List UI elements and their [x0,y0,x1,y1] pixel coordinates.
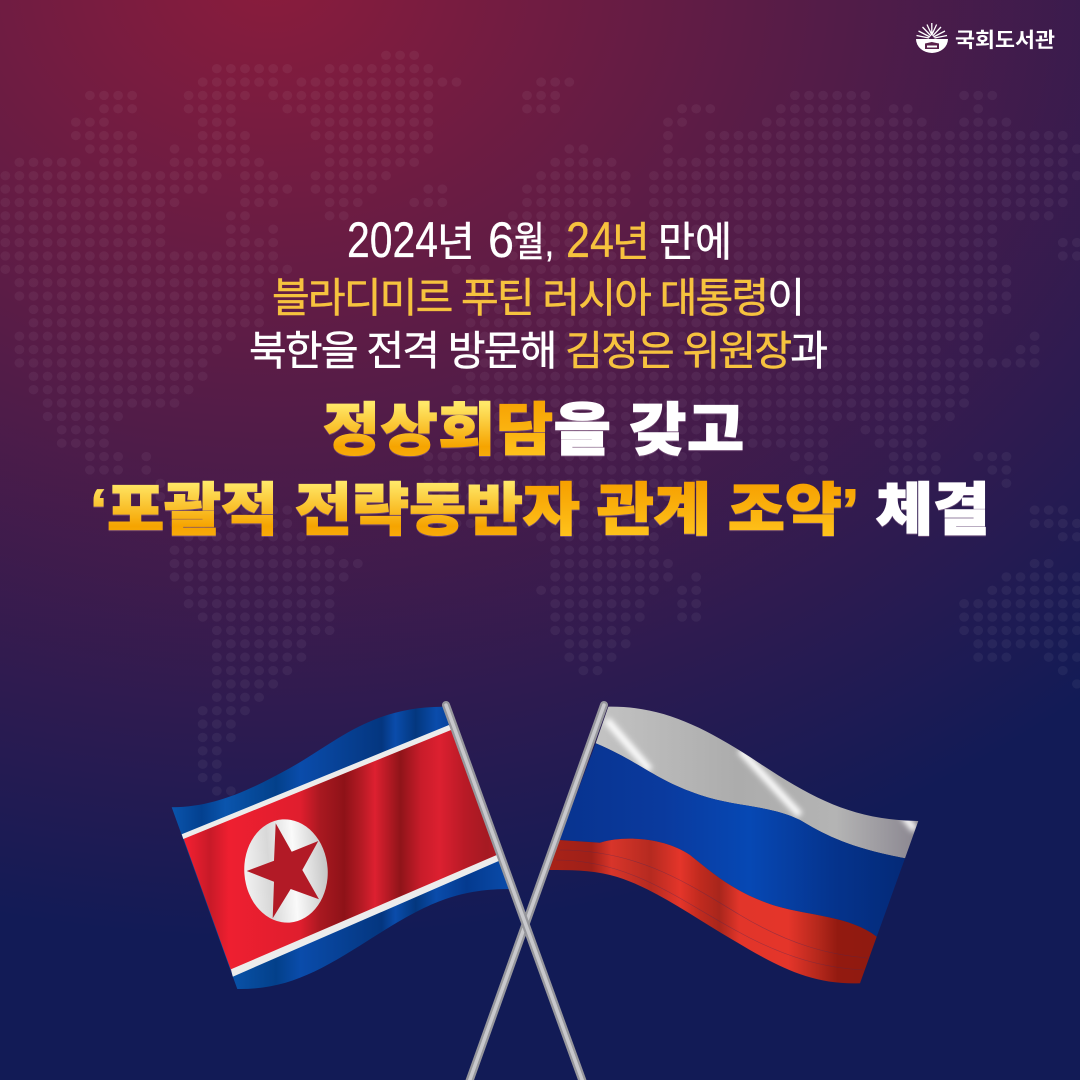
logo: National Assembly Library [916,23,1055,53]
line 1: 년 [437,219,475,265]
headline line 2: ‘포괄적 전략동반자 관계 조약’ 체결 [90,478,990,542]
emblem: red star [247,823,319,918]
line 1: 24 [566,212,614,268]
flagpole: Russia [468,705,604,1080]
emblem: white disc [241,817,331,925]
line 1 [347,212,732,268]
headline [90,398,990,542]
line 1: 월, [514,219,554,265]
flag: Russia [549,707,918,983]
white band [596,707,918,858]
logo wordmark: 국회도서관 [955,29,1055,52]
icon: open book bowl with rays [916,23,948,53]
headline line 1: 정상회담을 갖고 [323,398,744,462]
flagpole: North Korea [446,705,584,1080]
line 1: 년 [612,219,650,265]
flag: North Korea [165,700,515,995]
line 1: 6 [488,212,514,268]
intro text block [249,212,828,374]
red field [183,727,498,973]
line 1: 2024 [347,212,438,268]
line 1: 만에 [658,219,732,265]
line 2: 블라디미르 푸틴 러시아 대통령이 [272,275,805,321]
dotted world map [5,55,1077,791]
blue band [559,743,905,937]
red band [549,839,877,983]
line 3: 북한을 전격 방문해 김정은 위원장과 [249,328,828,374]
